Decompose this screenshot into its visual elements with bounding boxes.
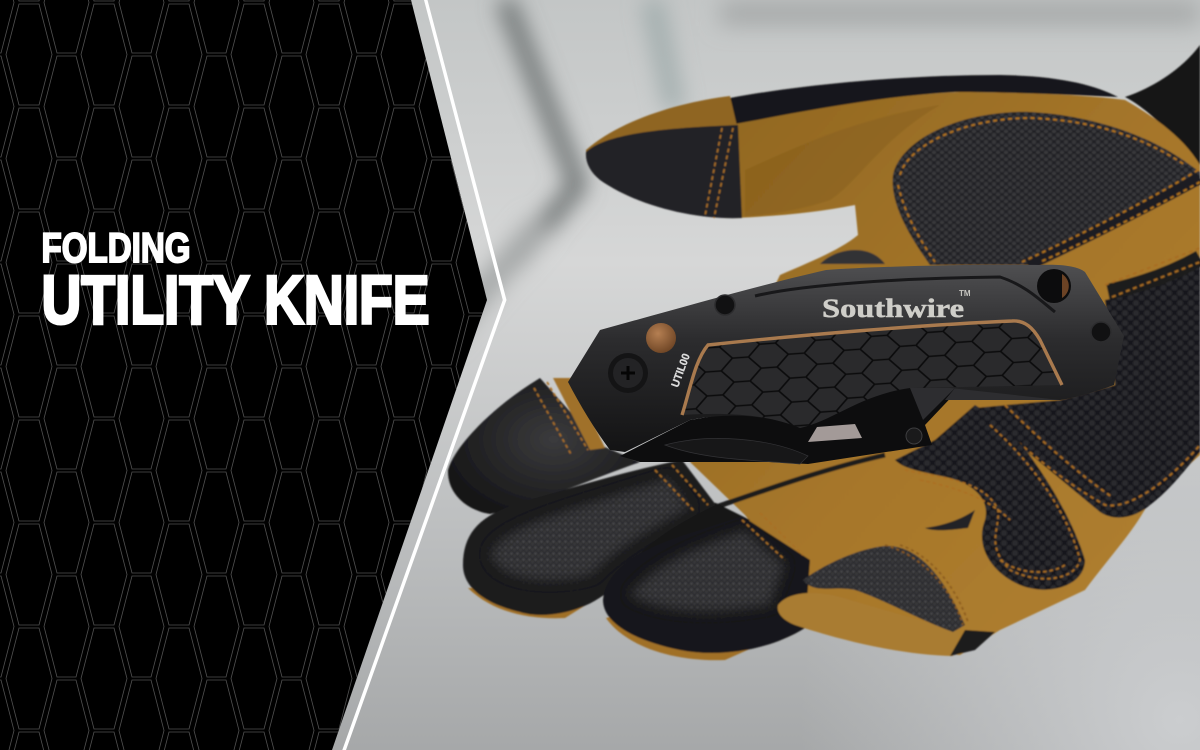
glove: palm mound textured patch xyxy=(895,405,1085,590)
title xyxy=(42,224,430,338)
silver thumb slide xyxy=(808,424,862,442)
white chevron line xyxy=(342,0,506,750)
title line 1: FOLDING xyxy=(42,224,190,271)
tan grip outline xyxy=(682,321,1062,415)
lower finger: leather fingertip xyxy=(448,378,640,514)
fold shading on index finger xyxy=(745,105,940,216)
upper patch dark border band xyxy=(1028,178,1200,265)
palm fold slit xyxy=(925,510,975,530)
mound stitching xyxy=(905,425,1080,579)
black hexagon panel xyxy=(0,0,487,750)
brown lock button xyxy=(646,323,676,353)
glove: ribbed black band on index finger xyxy=(730,75,1118,124)
thumb dark patch xyxy=(803,546,965,632)
pivot bolt xyxy=(608,353,648,393)
folding utility knife xyxy=(568,265,1124,464)
third finger grain xyxy=(630,528,788,616)
handle top groove xyxy=(755,277,1055,312)
title line 2: UTILITY KNIFE xyxy=(42,262,430,338)
photo: gloved hand xyxy=(448,45,1200,660)
model number: UTIL00 xyxy=(670,352,693,389)
thumb stitching xyxy=(885,545,968,625)
right patch stitching xyxy=(985,248,1200,506)
brand name: Southwire xyxy=(822,294,964,323)
second finger stitching xyxy=(655,465,708,512)
dark seam along lower palm xyxy=(716,455,885,507)
right patch dark border band xyxy=(1108,258,1200,292)
top screw xyxy=(715,295,735,315)
glove: tan palm and finger body xyxy=(690,92,1200,655)
stitching on index fingertip xyxy=(705,128,733,218)
shadow filling gap between lower fingers xyxy=(612,500,750,590)
glove: wrist cuff xyxy=(1125,45,1200,175)
knife lower frame and blade holder xyxy=(620,385,960,464)
upper patch stitching xyxy=(898,118,1200,262)
glove: index fingertip tan cap xyxy=(586,96,737,155)
thumb tan tip xyxy=(778,593,960,656)
knife handle xyxy=(568,265,1124,452)
curved thumb lever xyxy=(665,438,808,464)
knife blade xyxy=(910,388,1065,420)
lower finger: textured third finger xyxy=(603,516,810,653)
glove: index fingertip black leather xyxy=(586,125,742,218)
trademark: TM xyxy=(959,289,971,298)
glove: large right textured patch xyxy=(975,265,1200,518)
leather finger tan band xyxy=(553,378,605,450)
third finger stitching xyxy=(742,513,803,560)
second finger grain xyxy=(488,477,689,584)
small dark patch under knife top edge xyxy=(820,250,885,264)
right screw xyxy=(1091,322,1111,342)
thumb base black edge xyxy=(950,630,995,656)
tan rim under third finger xyxy=(606,610,770,660)
small lower screw xyxy=(906,428,922,444)
lanyard hole xyxy=(1037,269,1071,303)
lower finger: textured second finger xyxy=(463,460,716,615)
glove: upper palm textured patch xyxy=(893,112,1200,265)
grip insert xyxy=(682,321,1062,428)
tan rim under second finger xyxy=(468,588,610,618)
leather finger stitching xyxy=(534,382,588,456)
